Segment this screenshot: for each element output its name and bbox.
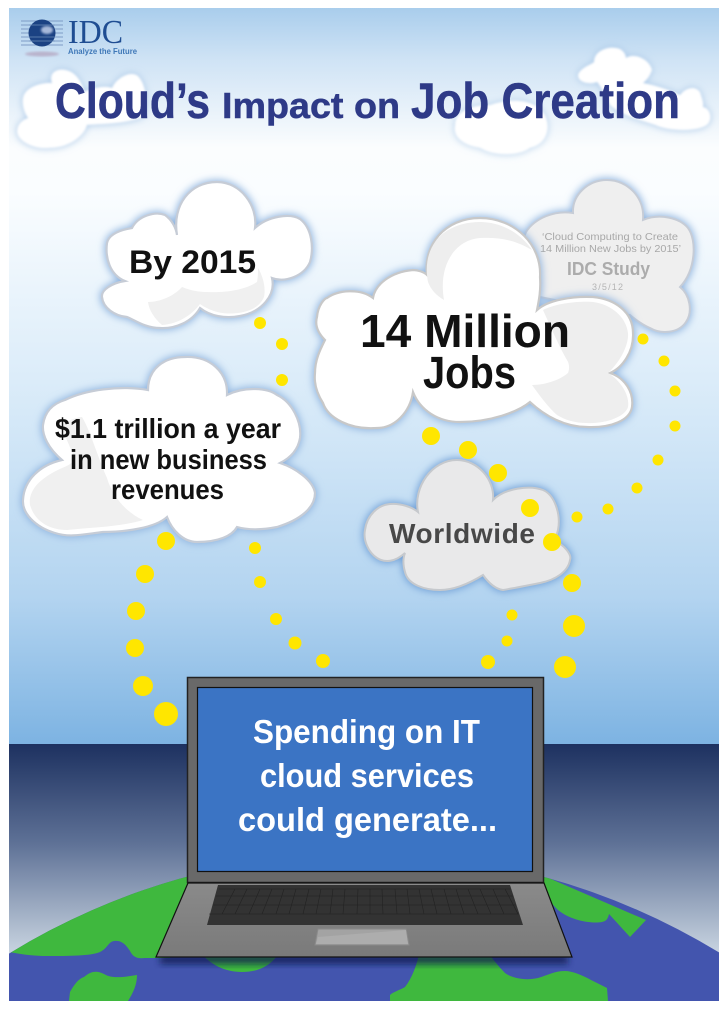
cloud: revenues: in new business — [70, 444, 267, 475]
laptop screen — [198, 688, 532, 872]
trail: laptop to By 2015 — [249, 542, 330, 668]
icon: IDC globe — [21, 20, 63, 56]
laptop shadow — [160, 955, 568, 964]
laptop base — [156, 883, 572, 957]
title word: Cloud's: Cloud’s — [55, 73, 210, 129]
land: bottom continent — [390, 958, 608, 1001]
keyboard — [207, 885, 523, 925]
title — [55, 73, 680, 129]
cloud: 14 Million Jobs — [315, 218, 633, 428]
land: small island — [69, 972, 137, 1001]
yellow dot trails — [126, 317, 680, 726]
globe — [9, 876, 719, 1001]
study name: IDC Study — [567, 259, 650, 279]
background clouds behind title — [17, 48, 710, 154]
cloud: revenues — [23, 357, 315, 542]
logo — [21, 14, 137, 56]
cloud: Worldwide — [365, 460, 570, 590]
sky background — [9, 8, 719, 744]
cloud: title left — [17, 70, 146, 148]
laptop — [156, 678, 572, 964]
land: centre lobe — [205, 958, 276, 972]
logo tagline: Analyze the Future — [68, 46, 137, 56]
screen text: Spending on IT — [253, 713, 480, 750]
logo wordmark: IDC — [68, 14, 123, 51]
title words: Job Creation: Job Creation — [411, 73, 680, 129]
label: Jobs: Jobs — [423, 347, 516, 398]
screen text — [238, 713, 497, 838]
trail: By 2015 to revenues — [254, 317, 288, 386]
trail: laptop to 14 Million — [422, 427, 585, 678]
land: right continent — [544, 877, 646, 937]
trail: laptop to revenues — [126, 532, 178, 726]
laptop screen bezel — [188, 678, 544, 882]
study date: 3/5/12 — [592, 282, 623, 292]
land: left continent — [11, 876, 188, 958]
horizon sea band — [9, 744, 719, 964]
trail: laptop to Worldwide — [481, 610, 518, 669]
label: revenue text: $1.1 trillion a year — [55, 413, 281, 444]
cloud: IDC Study quote — [523, 180, 694, 332]
cloud: IDC Study quote: 14 Million New Jobs by 2015’ — [540, 243, 681, 255]
label: Worldwide: Worldwide — [389, 518, 535, 549]
cloud: revenues: revenues — [111, 474, 224, 505]
screen text: cloud services — [260, 757, 474, 794]
trail: Worldwide to IDC Study — [572, 334, 680, 522]
label: 14 Million: 14 Million — [360, 305, 570, 357]
trackpad — [315, 929, 409, 945]
cloud: title middle — [455, 101, 548, 154]
screen text: could generate... — [238, 801, 497, 838]
cloud: title right — [578, 48, 710, 130]
label: By 2015: By 2015 — [129, 244, 256, 280]
quote text: ‘Cloud Computing to Create — [542, 231, 678, 243]
title words: Impact on: Impact on — [222, 85, 400, 126]
cloud: By 2015 — [102, 182, 312, 328]
